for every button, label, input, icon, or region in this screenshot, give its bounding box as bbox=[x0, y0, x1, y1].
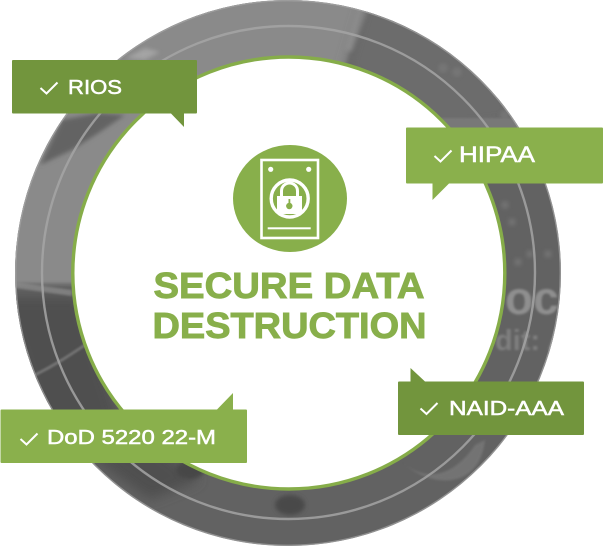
title bbox=[152, 265, 426, 346]
callout: DoD 5220 22-M: DoD 5220 22-M bbox=[47, 426, 216, 449]
upper left lighter area bbox=[0, 0, 372, 284]
callout: DoD 5220 22-M bbox=[0, 393, 247, 463]
callout: RIOS bbox=[12, 60, 197, 127]
icon: locked hard drive bbox=[233, 145, 347, 252]
photo ring: dit: A bbox=[495, 325, 568, 357]
title: DESTRUCTION bbox=[152, 305, 426, 346]
upper right mid tone bbox=[344, 10, 512, 118]
ghost photo text: ock bbox=[505, 272, 585, 324]
thin light ring bbox=[42, 26, 535, 519]
callout: NAID-AAA: NAID-AAA bbox=[449, 397, 564, 420]
lower left dark area bbox=[16, 292, 192, 499]
callout: NAID-AAA bbox=[398, 368, 584, 435]
lower shadows bbox=[275, 495, 305, 515]
dark reflections upper left bbox=[40, 113, 125, 165]
strap highlights bbox=[15, 282, 72, 296]
callout: RIOS: RIOS bbox=[68, 76, 122, 99]
title: SECURE DATA bbox=[154, 265, 425, 306]
callout: HIPAA: HIPAA bbox=[459, 142, 535, 167]
inner white disc with green ring bbox=[73, 57, 505, 489]
callout: HIPAA bbox=[406, 128, 603, 200]
